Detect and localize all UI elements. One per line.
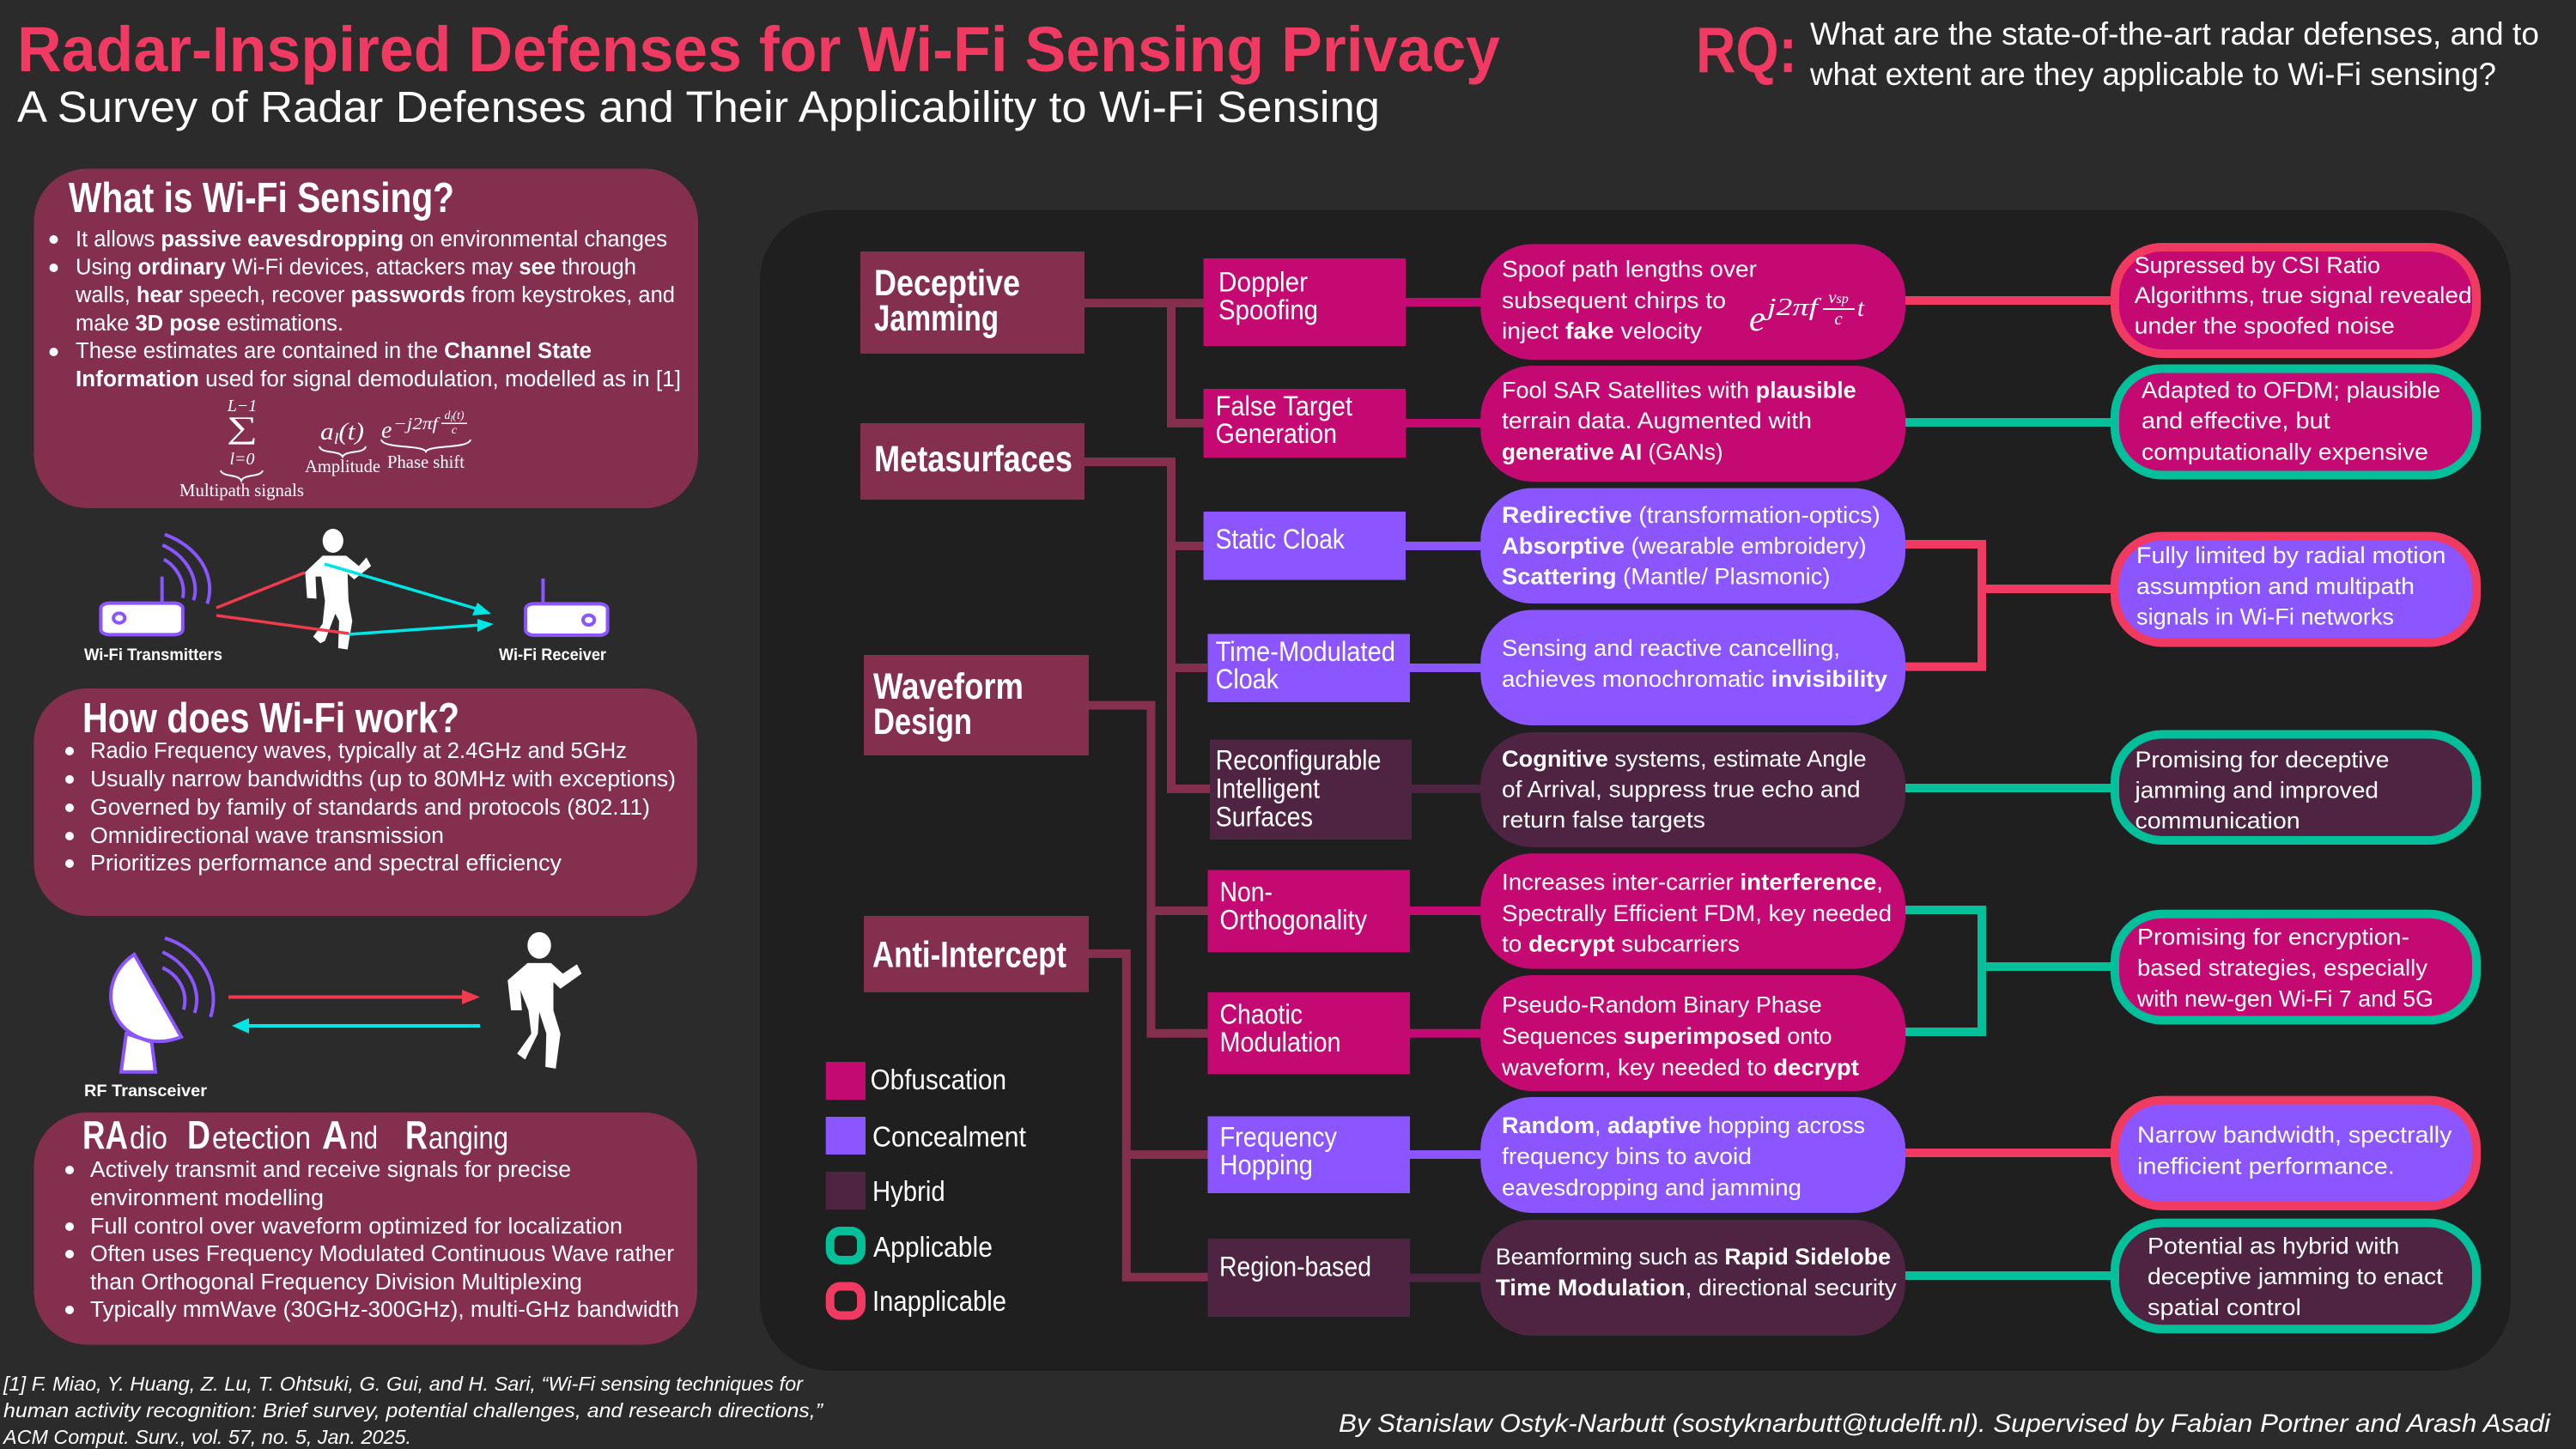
description: false target generation: terrain data. Augmented with (1502, 408, 1812, 433)
bullet list: environment modelling (90, 1186, 324, 1210)
applicability: applicable, spatial control: deceptive jamming to enact (2148, 1264, 2444, 1289)
technique: chaotic modulation (1207, 992, 1410, 1074)
applicability: applicable, OFDM (2115, 369, 2476, 476)
heading: etection (212, 1120, 311, 1155)
description: static cloak: Absorptive (wearable embroidery) (1502, 533, 1867, 559)
description: static cloak (1480, 488, 1905, 603)
description: non-orthogonality: Spectrally Efficient FDM, key needed (1502, 900, 1892, 926)
technique: Doppler spoofing: Spoofing (1218, 294, 1318, 325)
category: anti-intercept: Anti-Intercept (872, 934, 1066, 975)
bullet list: Radio Frequency waves, typically at 2.4GHz and 5GHz (90, 739, 627, 763)
technique: time-modulated cloak (1207, 634, 1410, 702)
bullet list: Actively transmit and receive signals for precise (90, 1158, 571, 1182)
CSI formula: (t) (338, 419, 364, 446)
description: reconfigurable intelligent surfaces (1480, 732, 1905, 847)
applicability: inapplicable, narrow bandwidth: inefficient performance. (2137, 1154, 2395, 1179)
description: Doppler spoofing: Spoof path lengths over (1502, 256, 1757, 282)
legend item: applicable (830, 1231, 993, 1263)
category: metasurfaces: Metasurfaces (874, 439, 1072, 480)
category: waveform design: Waveform (873, 666, 1024, 707)
technique: reconfigurable intelligent surfaces: Intelligent (1216, 773, 1320, 803)
formula: Doppler phase: c (1834, 308, 1843, 329)
description: non-orthogonality: to decrypt subcarriers (1502, 931, 1740, 957)
heading: anging (428, 1120, 508, 1155)
description: time-modulated cloak (1480, 609, 1905, 725)
heading: How does Wi-Fi work? (82, 695, 459, 742)
CSI formula: −j2πf (393, 415, 440, 433)
bullet list: These estimates are contained in the Channel State (76, 339, 592, 363)
diagram: Wi-Fi sensing setup (84, 529, 608, 664)
bullet list: It allows passive eavesdropping on environmental changes (76, 227, 667, 252)
description: region-based (1480, 1220, 1905, 1336)
bullet list: Typically mmWave (30GHz-300GHz), multi-GHz bandwidth (90, 1298, 679, 1322)
technique: reconfigurable intelligent surfaces (1210, 740, 1412, 840)
icon: radar dish (111, 938, 213, 1072)
CSI formula: e (381, 417, 392, 444)
applicability: inapplicable, radial motion: signals in Wi-Fi networks (2136, 604, 2394, 630)
applicability: inapplicable, radial motion (2115, 537, 2476, 643)
technique: false target generation: False Target (1216, 391, 1352, 421)
description: reconfigurable intelligent surfaces: Cognitive systems, estimate Angle (1502, 746, 1867, 772)
technique: time-modulated cloak: Time-Modulated (1216, 636, 1395, 667)
technique: reconfigurable intelligent surfaces: Surfaces (1216, 802, 1313, 833)
technique: non-orthogonality (1207, 870, 1410, 952)
technique: static cloak (1204, 512, 1406, 580)
applicability: applicable, encryption (2115, 914, 2476, 1020)
technique: time-modulated cloak: Cloak (1216, 664, 1279, 694)
connectors: technique to description (1406, 302, 1480, 1278)
CSI formula: Amplitude (305, 456, 380, 476)
bullet list: Omnidirectional wave transmission (90, 824, 444, 848)
arrows: signal paths (216, 564, 494, 634)
technique: frequency hopping (1207, 1116, 1410, 1193)
icon: Wi-Fi transmitter (100, 535, 210, 634)
icon: Wi-Fi receiver (526, 579, 608, 635)
description: false target generation (1480, 366, 1905, 482)
CSI formula: ∑ (227, 410, 258, 445)
bullet list: Full control over waveform optimized for localization (90, 1215, 623, 1239)
CSI formula: (t) (453, 409, 465, 422)
bullet list: Information used for signal demodulation, modelled as in [1] (76, 367, 681, 391)
bullet list (65, 739, 676, 876)
bullet list: Governed by family of standards and protocols (802.11) (90, 796, 650, 820)
panel: what is Wi-Fi sensing (34, 168, 698, 508)
legend item: concealment: Concealment (872, 1121, 1026, 1152)
description: time-modulated cloak: Sensing and reactive cancelling, (1502, 635, 1840, 661)
description: region-based: Time Modulation , directional security (1496, 1275, 1897, 1300)
heading: nd (349, 1120, 378, 1155)
description: Doppler spoofing (1480, 244, 1905, 360)
applicability: applicable, OFDM: and effective, but (2142, 408, 2330, 433)
description: frequency hopping: eavesdropping and jamming (1502, 1175, 1801, 1201)
technique: Doppler spoofing (1204, 258, 1406, 346)
citation: human activity recognition: Brief survey, potential challenges, and research directions,” (3, 1399, 823, 1422)
category: waveform design (864, 655, 1089, 755)
description: chaotic modulation: Pseudo-Random Binary Phase (1502, 992, 1822, 1018)
category: metasurfaces (860, 423, 1084, 500)
bullet list (65, 1158, 679, 1322)
author credit: By Stanislaw Ostyk-Narbutt (sostyknarbutt@tudelft.nl). Supervised by Fabian Portner and Arash Asadi (1339, 1410, 2551, 1438)
legend item: hybrid (826, 1172, 945, 1210)
RQ text: What are the state-of-the-art radar defenses, and to (1810, 16, 2539, 52)
formula: Doppler phase (1749, 287, 1865, 339)
RQ text: what extent are they applicable to Wi-Fi sensing? (1809, 57, 2496, 92)
applicability: inapplicable, narrow bandwidth (2115, 1100, 2476, 1206)
legend (826, 1062, 1026, 1317)
legend item: obfuscation (826, 1062, 1006, 1100)
legend item: obfuscation: Obfuscation (871, 1064, 1006, 1095)
citation: ACM Comput. Surv., vol. 57, no. 5, Jan. 2025. (2, 1426, 411, 1448)
panel: radio detection and ranging (34, 1113, 697, 1344)
technique: false target generation (1204, 389, 1406, 458)
icon: person (305, 529, 371, 650)
category: deceptive jamming: Deceptive (874, 263, 1020, 304)
arrow: reflected signal (232, 1018, 480, 1034)
description: frequency hopping (1480, 1097, 1905, 1213)
description: Doppler spoofing: inject fake velocity (1502, 318, 1703, 344)
connectors: category to technique (1084, 303, 1210, 1277)
CSI formula: l=0 (229, 450, 255, 469)
technique: frequency hopping: Hopping (1219, 1149, 1313, 1180)
diagram: radar setup (84, 932, 581, 1100)
CSI formula: Multipath signals (179, 480, 304, 500)
description: reconfigurable intelligent surfaces: of Arrival, suppress true echo and (1502, 777, 1861, 803)
applicability: applicable, encryption: Promising for encryption- (2137, 925, 2409, 950)
legend item: inapplicable (830, 1285, 1006, 1317)
bullet list: Using ordinary Wi-Fi devices, attackers may see through (76, 256, 636, 280)
label: Wi-Fi receiver: Wi-Fi Receiver (499, 646, 607, 664)
legend item: inapplicable: Inapplicable (872, 1285, 1006, 1317)
applicability: applicable, spatial control: Potential as hybrid with (2148, 1233, 2399, 1258)
heading: RA (82, 1113, 128, 1157)
applicability: applicable, spatial control: spatial control (2148, 1294, 2301, 1320)
description: chaotic modulation (1480, 975, 1905, 1091)
CSI formula: a (320, 419, 332, 446)
technique: false target generation: Generation (1216, 418, 1337, 449)
RQ text (1809, 16, 2539, 92)
applicability: applicable, deceptive jamming: jamming and improved (2134, 778, 2379, 803)
applicability: inapplicable, radial motion: assumption and multipath (2136, 573, 2415, 599)
applicability: applicable, spatial control (2115, 1223, 2476, 1329)
applicability: inapplicable, CSI ratio: under the spoofed noise (2135, 313, 2395, 339)
description: false target generation: Fool SAR Satellites with plausible (1502, 378, 1856, 403)
applicability: applicable, deceptive jamming: communication (2135, 808, 2300, 834)
technique: non-orthogonality: Non- (1219, 876, 1273, 907)
research question (1696, 14, 2539, 92)
bullet list: Prioritizes performance and spectral efficiency (90, 852, 562, 876)
description: chaotic modulation: Sequences superimposed onto (1502, 1023, 1832, 1049)
bullet list: walls, hear speech, recover passwords from keystrokes, and (75, 283, 675, 307)
heading: R (405, 1113, 428, 1157)
technique: region-based (1207, 1239, 1410, 1317)
category: waveform design: Design (873, 701, 972, 743)
description: time-modulated cloak: achieves monochromatic invisibility (1502, 666, 1887, 692)
heading: dio (130, 1120, 167, 1155)
category: anti-intercept (864, 916, 1089, 992)
applicability: applicable, deceptive jamming: Promising for deceptive (2135, 747, 2389, 773)
legend item: concealment (826, 1117, 1026, 1155)
CSI formula: l (334, 430, 338, 447)
formula: Doppler phase: t (1857, 294, 1865, 322)
heading: A (322, 1113, 348, 1157)
description: region-based: Beamforming such as Rapid Sidelobe (1496, 1244, 1891, 1270)
applicability: inapplicable, radial motion: Fully limited by radial motion (2136, 543, 2445, 568)
applicability: applicable, OFDM: computationally expensive (2142, 440, 2428, 465)
applicability: applicable, encryption: based strategies, especially (2137, 955, 2428, 980)
description: non-orthogonality (1480, 853, 1905, 969)
applicability: inapplicable, narrow bandwidth: Narrow bandwidth, spectrally (2137, 1122, 2452, 1148)
connectors: description to applicability (1905, 300, 2111, 1276)
heading (82, 1113, 508, 1157)
description: false target generation: generative AI (GANs) (1502, 440, 1723, 465)
description: frequency hopping: Random, adaptive hopping across (1502, 1113, 1865, 1138)
CSI formula: d (445, 409, 450, 422)
applicability: inapplicable, CSI ratio: Supressed by CSI Ratio (2135, 252, 2380, 278)
technique: static cloak: Static Cloak (1216, 524, 1346, 555)
applicability: applicable, encryption: with new-gen Wi-Fi 7 and 5G (2136, 986, 2433, 1012)
description: Doppler spoofing: subsequent chirps to (1502, 288, 1726, 313)
technique: Doppler spoofing: Doppler (1218, 266, 1308, 297)
CSI formula: Phase shift (387, 452, 465, 472)
category: deceptive jamming (860, 252, 1084, 354)
RQ label: RQ: (1696, 14, 1797, 86)
description: reconfigurable intelligent surfaces: return false targets (1502, 807, 1705, 833)
CSI formula: L−1 (227, 397, 257, 415)
bullet list (50, 227, 681, 391)
label: Wi-Fi transmitters: Wi-Fi Transmitters (84, 646, 222, 664)
applicability: inapplicable, CSI ratio (2115, 247, 2476, 354)
bullet list: Often uses Frequency Modulated Continuous Wave rather (90, 1242, 675, 1266)
applicability: applicable, OFDM: Adapted to OFDM; plausible (2142, 378, 2440, 403)
panel: taxonomy of radar defenses (760, 210, 2511, 1371)
citation (2, 1373, 823, 1448)
category: deceptive jamming: Jamming (874, 298, 999, 339)
arrow: transmitted signal (228, 990, 480, 1004)
applicability: inapplicable, CSI ratio: Algorithms, true signal revealed (2135, 282, 2472, 308)
panel: how does Wi-Fi work (34, 688, 697, 916)
description: static cloak: Scattering (Mantle/ Plasmonic) (1502, 564, 1831, 590)
CSI formula (179, 397, 471, 500)
description: static cloak: Redirective (transformation-optics) (1502, 502, 1880, 528)
CSI formula: c (452, 424, 458, 437)
formula: Doppler phase: e (1749, 300, 1765, 339)
technique: frequency hopping: Frequency (1219, 1121, 1337, 1152)
technique: chaotic modulation: Chaotic (1219, 999, 1303, 1030)
technique: chaotic modulation: Modulation (1219, 1027, 1341, 1058)
technique: region-based: Region-based (1219, 1252, 1371, 1282)
description: non-orthogonality: Increases inter-carrier interference , (1502, 870, 1883, 895)
description: frequency hopping: frequency bins to avoid (1502, 1143, 1752, 1169)
technique: reconfigurable intelligent surfaces: Reconfigurable (1216, 745, 1381, 776)
bullet list: make 3D pose estimations. (76, 312, 343, 336)
icon: person (507, 932, 581, 1069)
label: RF transceiver: RF Transceiver (84, 1082, 208, 1100)
subtitle: A Survey of Radar Defenses and Their Applicability to Wi-Fi Sensing (17, 82, 1380, 131)
heading: D (187, 1113, 210, 1157)
description: chaotic modulation: waveform, key needed to decrypt (1501, 1054, 1859, 1080)
title: Radar-Inspired Defenses for Wi-Fi Sensing Privacy (17, 14, 1500, 85)
bullet list: Usually narrow bandwidths (up to 80MHz with exceptions) (90, 767, 676, 791)
legend item: applicable: Applicable (873, 1231, 993, 1263)
applicability: applicable, deceptive jamming (2115, 735, 2476, 840)
CSI formula: l (450, 415, 453, 424)
technique: non-orthogonality: Orthogonality (1219, 905, 1367, 936)
heading: What is Wi-Fi Sensing? (69, 175, 454, 221)
legend item: hybrid: Hybrid (872, 1175, 945, 1207)
bullet list: than Orthogonal Frequency Division Multiplexing (90, 1270, 582, 1294)
formula: Doppler phase: vsp (1828, 287, 1849, 307)
citation: [1] F. Miao, Y. Huang, Z. Lu, T. Ohtsuki, G. Gui, and H. Sari, “Wi-Fi sensing techniques for (3, 1373, 804, 1395)
formula: Doppler phase: j2πf (1763, 294, 1822, 321)
